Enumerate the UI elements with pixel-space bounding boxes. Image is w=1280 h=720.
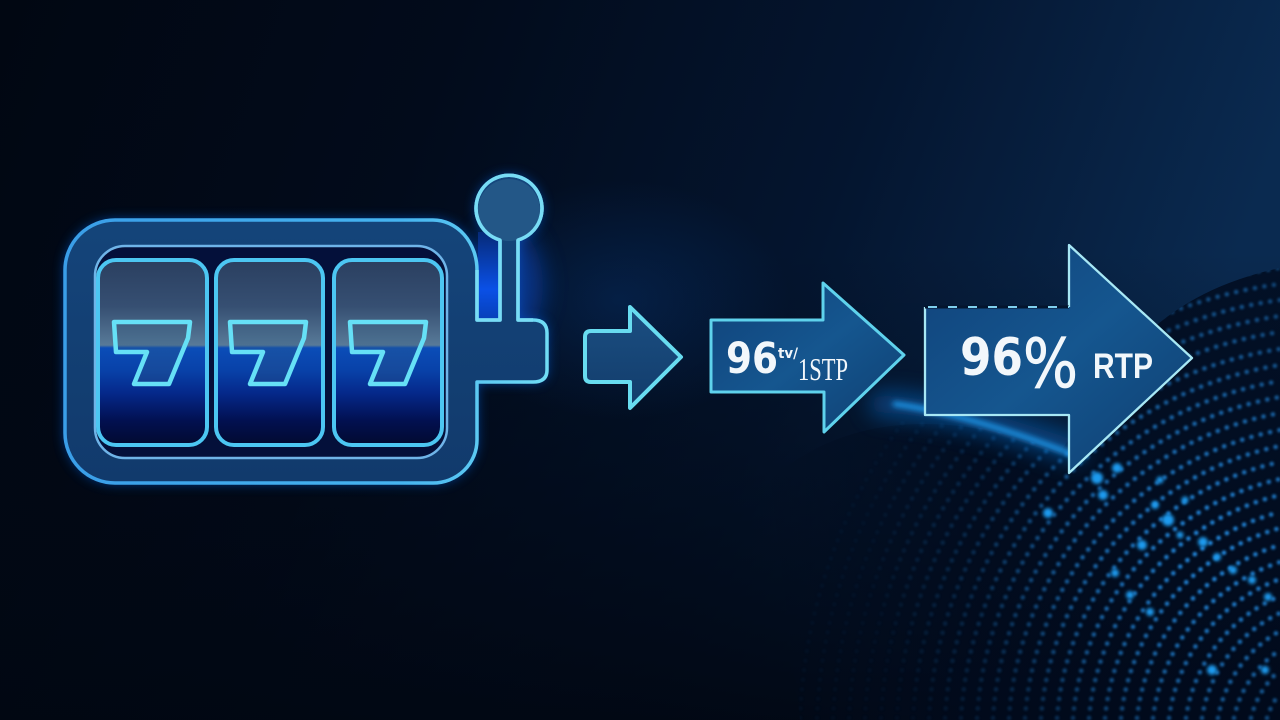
reel 2 <box>216 260 323 445</box>
arrow 3 top edge <box>925 306 1069 308</box>
lever halo <box>467 225 543 345</box>
arrow 3 text: RTP: RTP <box>1093 347 1153 386</box>
arrow 2 text: 96 <box>726 334 778 384</box>
seven 3 <box>350 322 426 384</box>
glowing wave crest <box>880 404 1082 458</box>
arrow 3 outline <box>925 245 1192 473</box>
arrow 3 text: percent: % <box>1023 325 1078 404</box>
arrow 3 text: 96: 96 <box>960 328 1023 388</box>
slot machine glow <box>65 175 547 483</box>
arrow 2 with label <box>711 283 904 432</box>
lever outline <box>476 175 542 320</box>
reel screen <box>95 246 447 458</box>
reel 3 <box>334 260 442 445</box>
seven 2 <box>230 322 306 384</box>
dotted wave <box>876 268 1280 720</box>
reel 1 <box>98 260 207 445</box>
lever window <box>478 232 501 320</box>
arrow 2 with label: tv/ <box>778 346 799 362</box>
lever head fill <box>478 179 540 241</box>
seven 1 <box>114 322 190 384</box>
icon: slot machine <box>65 175 547 483</box>
wave silhouette <box>770 268 1280 720</box>
slot machine body <box>65 175 547 483</box>
arrow 2 with label: 1STP <box>798 351 848 387</box>
arrow 3 with label <box>925 245 1192 473</box>
arrow 1 <box>585 307 681 408</box>
